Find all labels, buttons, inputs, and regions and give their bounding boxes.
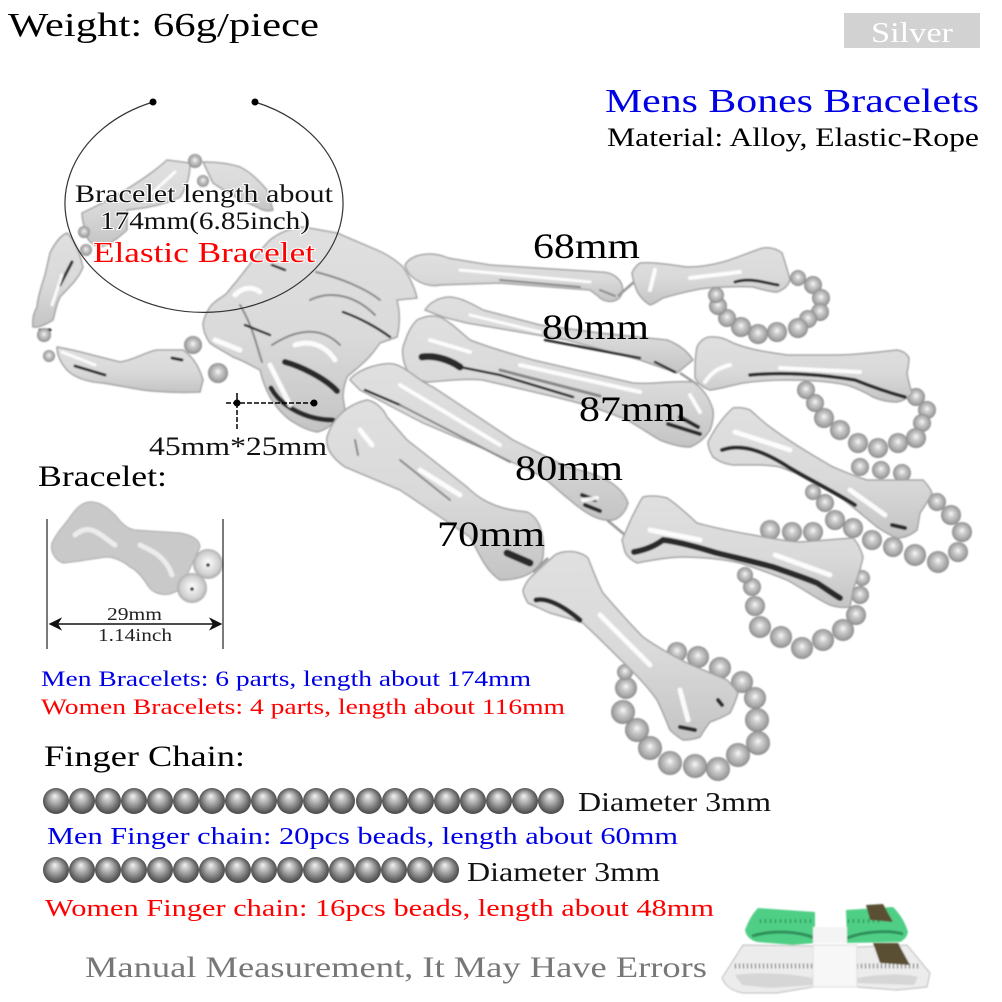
finger 1 bead loop <box>708 270 830 344</box>
colour tag: silver: Silver <box>871 18 954 49</box>
finger 5 metacarpal, 70mm <box>327 400 548 580</box>
bracelet link detail: 1.14inch <box>98 625 172 645</box>
bracelet link heading: Bracelet: <box>38 460 167 493</box>
finger length labels: 80mm <box>542 307 649 347</box>
finger length labels: 80mm <box>515 448 623 488</box>
colour tag: silver <box>844 13 980 49</box>
finger 2 proximal bone, 80mm <box>425 297 698 385</box>
icon: measuring tapes <box>722 904 930 993</box>
finger 3 bead loop <box>805 484 972 573</box>
product title: Mens Bones Bracelets <box>605 83 979 120</box>
weight heading: Weight: 66g/piece <box>8 7 319 44</box>
white tape <box>722 943 930 993</box>
bracelet length arc <box>65 98 343 312</box>
palm bones <box>203 227 417 432</box>
finger 5 distal bone <box>523 551 738 740</box>
finger length labels <box>437 226 686 554</box>
palm size marker <box>149 393 327 461</box>
finger 4 upper beads <box>760 520 823 542</box>
bracelet length text: 174mm(6.85inch) <box>100 208 310 235</box>
finger 1 bones, 68mm <box>405 248 790 305</box>
bracelet length text: Elastic Bracelet <box>93 238 315 269</box>
bracelet length text <box>75 181 333 269</box>
icon: single bone link <box>52 502 223 603</box>
finger 5 upper beads <box>667 642 753 693</box>
women finger chain beads <box>43 857 459 883</box>
women finger chain spec: Women Finger chain: 16pcs beads, length about 48mm <box>45 896 714 922</box>
finger length labels: 87mm <box>579 389 686 429</box>
bracelet link detail <box>47 502 223 649</box>
measurement disclaimer: Manual Measurement, It May Have Errors <box>85 951 707 984</box>
finger 4 metacarpal, 80mm <box>350 364 628 535</box>
finger 5 bead loop <box>611 664 770 781</box>
finger 2 bead loop <box>797 381 936 458</box>
women bracelet spec: Women Bracelets: 4 parts, length about 116mm <box>41 694 565 719</box>
finger chain heading: Finger Chain: <box>44 740 245 773</box>
finger 2 distal bone <box>695 337 912 402</box>
men finger chain spec: Men Finger chain: 20pcs beads, length about 60mm <box>47 824 678 850</box>
material line: Material: Alloy, Elastic-Rope <box>607 123 979 152</box>
finger 4 bead loop <box>737 567 870 659</box>
finger 3 upper beads <box>851 458 911 482</box>
men chain diameter: Diameter 3mm <box>578 787 771 817</box>
finger 3 distal bone <box>708 408 932 538</box>
men finger chain beads <box>43 788 564 814</box>
bracelet link detail: 29mm <box>107 604 162 624</box>
palm size marker: 45mm*25mm <box>149 432 327 461</box>
finger length labels: 68mm <box>533 226 640 266</box>
women chain diameter: Diameter 3mm <box>467 857 660 887</box>
elastic bracelet links <box>33 154 273 392</box>
men bracelet spec: Men Bracelets: 6 parts, length about 174mm <box>41 666 531 691</box>
bracelet length text: Bracelet length about <box>75 181 333 208</box>
finger 4 distal bone <box>622 496 863 607</box>
green tape <box>745 904 908 945</box>
skeleton hand bracelet photo <box>33 154 972 781</box>
finger 3 metacarpal, 87mm <box>403 316 722 447</box>
finger length labels: 70mm <box>437 514 545 554</box>
